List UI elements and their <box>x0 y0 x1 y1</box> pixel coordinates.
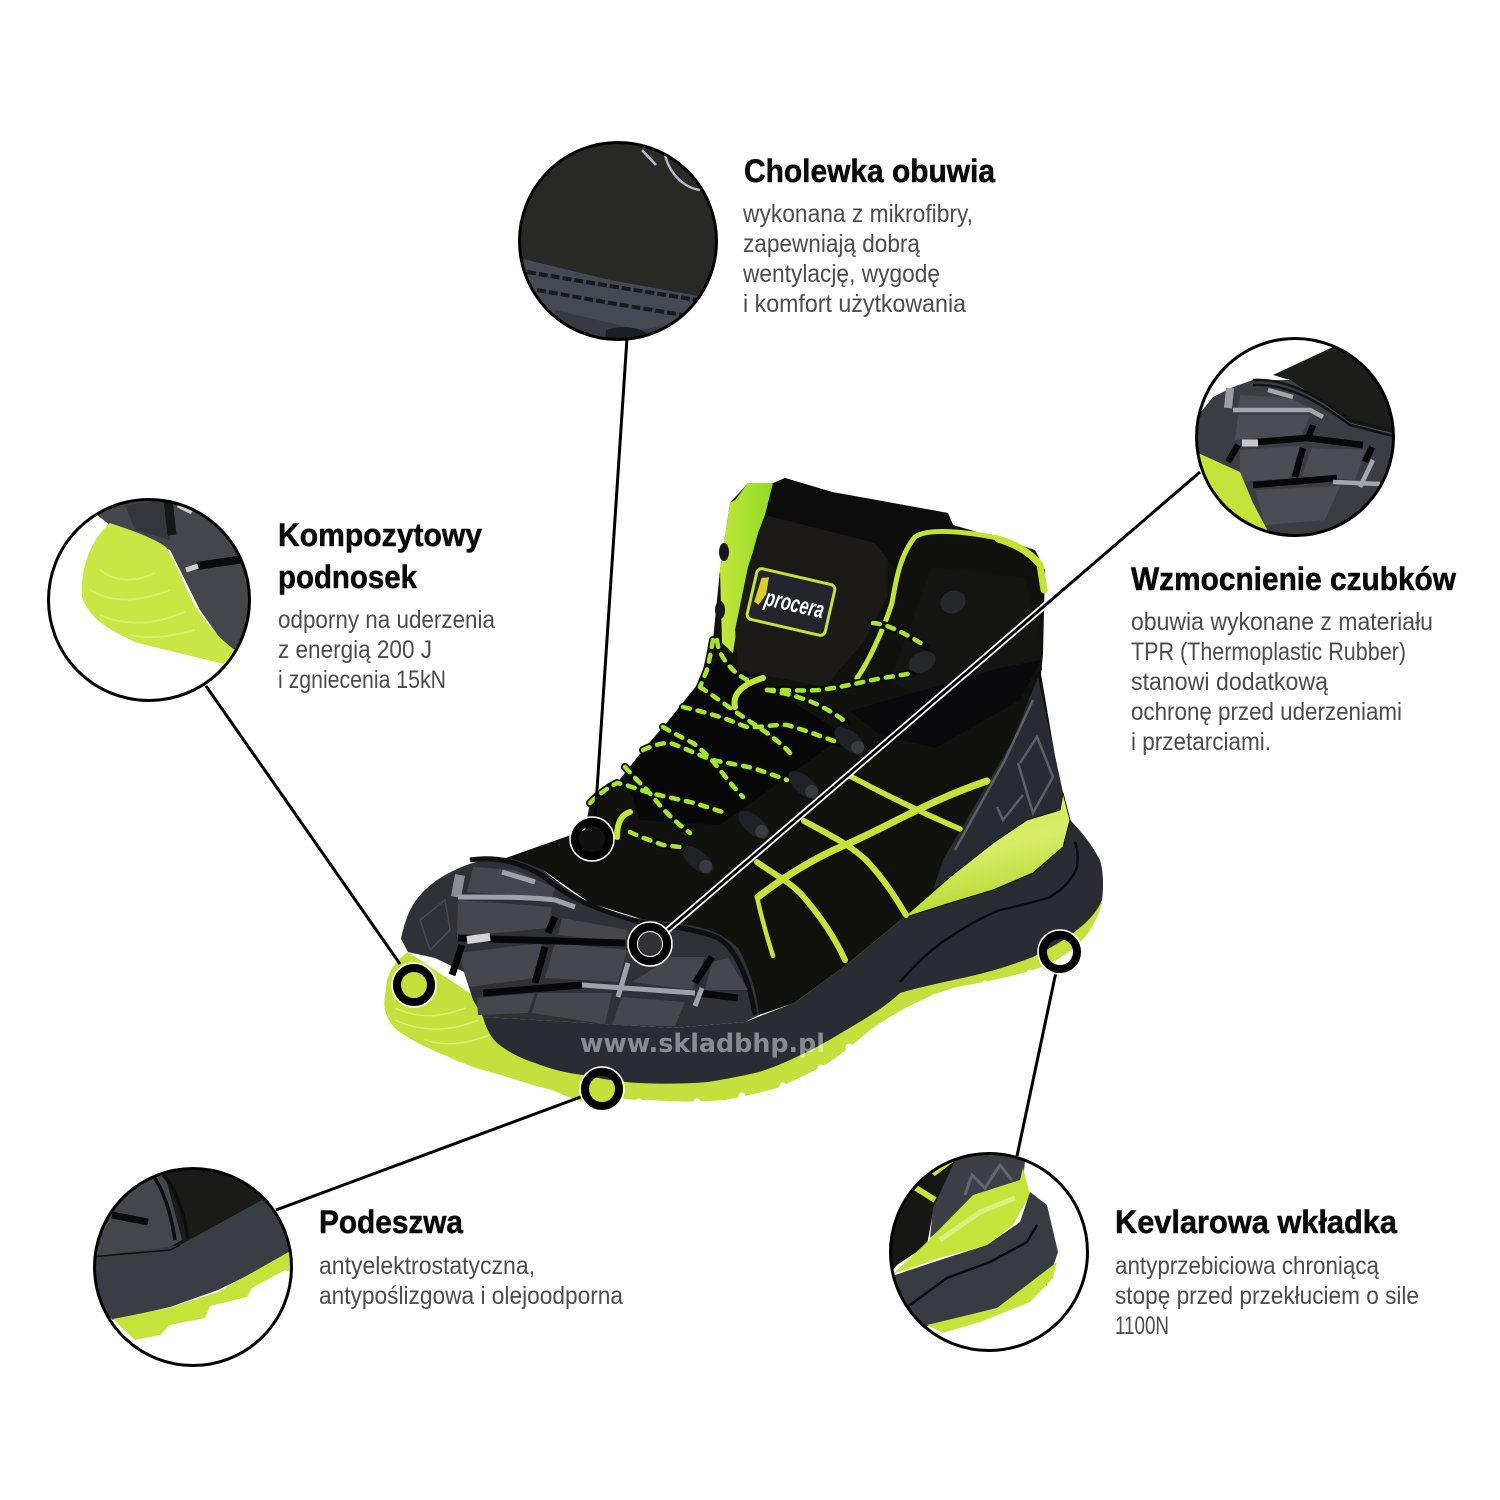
leader line <box>662 472 1200 935</box>
laces <box>590 623 927 847</box>
lace gap <box>625 660 845 825</box>
description: 1100N <box>1115 1312 1169 1340</box>
midsole groove <box>900 842 1078 982</box>
description <box>319 1252 623 1310</box>
description: antyelektrostatyczna, <box>319 1252 535 1280</box>
description: obuwia wykonane z materiału <box>1131 608 1433 636</box>
heel counter <box>933 677 1063 890</box>
lime toe ridges <box>395 1008 490 1044</box>
mesh band <box>850 660 1041 748</box>
heel counter lines <box>955 700 1053 850</box>
heading <box>278 517 482 595</box>
marker ring <box>392 963 436 1007</box>
heading: Podeszwa <box>319 1204 463 1240</box>
watermark: www.skladbhp.pl <box>580 1029 825 1059</box>
description: zapewniają dobrą <box>743 230 920 258</box>
eyelets <box>678 543 969 879</box>
brand label: procera <box>746 568 836 636</box>
leader line <box>595 338 627 820</box>
marker ring <box>628 922 672 966</box>
detail circle: sole <box>90 1160 300 1371</box>
description: i zgniecenia 15kN <box>278 666 446 694</box>
heading: podnosek <box>278 559 417 595</box>
heading: Kompozytowy <box>278 517 482 553</box>
callout: Wzmocnienie czubków <box>628 335 1456 966</box>
description: stopę przed przekłuciem o sile <box>1115 1282 1419 1310</box>
heading: Kevlarowa wkładka <box>1115 1204 1397 1240</box>
leader line <box>276 1095 586 1210</box>
description: wykonana z mikrofibry, <box>742 200 973 228</box>
description <box>742 200 973 318</box>
description: stanowi dodatkową <box>1131 668 1328 696</box>
lime collar lining <box>720 483 773 653</box>
illustration: safety boot <box>384 478 1103 1107</box>
detail circle: upper material <box>518 141 718 341</box>
midsole <box>483 810 1103 1084</box>
description: TPR (Thermoplastic Rubber) <box>1131 638 1406 666</box>
ankle panel <box>890 567 1042 720</box>
toe cap black bars <box>452 917 738 998</box>
outsole tread notches <box>636 970 1034 1106</box>
detail circle: toe cap <box>1190 335 1400 540</box>
lime heel wedge <box>903 793 1070 918</box>
brand label: procera: procera <box>762 584 827 624</box>
callout: Kevlarowa wkładka <box>880 930 1419 1356</box>
toe cap panels <box>457 867 748 1026</box>
description: antypoślizgowa i olejoodporna <box>319 1282 623 1310</box>
tongue flap <box>735 515 888 687</box>
description <box>1131 608 1433 756</box>
heading: Wzmocnienie czubków <box>1131 561 1456 597</box>
callout: Kompozytowy podnosek <box>45 495 495 1007</box>
collar top <box>765 478 953 570</box>
toe cap highlights <box>456 875 460 897</box>
marker ring <box>1038 930 1082 974</box>
leader line <box>1017 972 1056 1156</box>
marker ring <box>580 1067 624 1111</box>
lime side stripes <box>757 776 987 960</box>
description: wentylację, wygodę <box>742 260 940 288</box>
marker ring <box>570 817 614 861</box>
callout: Podeszwa <box>90 1067 624 1371</box>
collar piping <box>857 532 1044 678</box>
outsole: lime <box>384 880 1102 1107</box>
description: i przetarciami. <box>1131 728 1271 756</box>
description: odporny na uderzenia <box>278 606 495 634</box>
description: z energią 200 J <box>278 636 432 664</box>
description: antyprzebiciowa chroniącą <box>1115 1252 1379 1280</box>
description <box>278 606 495 694</box>
leader line <box>206 686 400 964</box>
upper body <box>506 478 1063 1015</box>
callout: Cholewka obuwia <box>515 130 995 861</box>
description: ochronę przed uderzeniami <box>1131 698 1402 726</box>
description <box>1115 1252 1419 1340</box>
heading: Cholewka obuwia <box>744 153 995 189</box>
detail circle: heel insert <box>880 1150 1093 1356</box>
description: i komfort użytkowania <box>743 290 966 318</box>
detail circle: composite toe <box>45 495 255 705</box>
toe cap stitching <box>470 859 755 1015</box>
toe cap <box>401 858 759 1028</box>
